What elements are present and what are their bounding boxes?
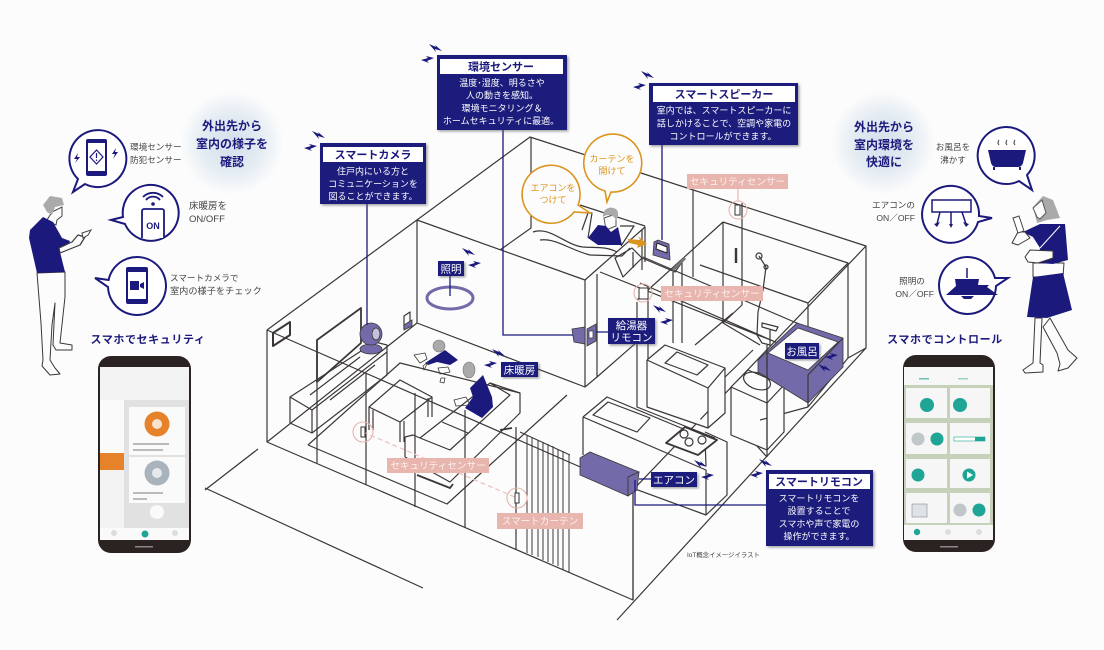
sofa: [405, 383, 520, 482]
callout: smart remote: 設置することで: [788, 506, 850, 516]
callout: environment sensor: 環境モニタリング＆: [461, 102, 543, 114]
callout: smart camera: 住戸内にいる方と: [337, 166, 409, 176]
heading glow right: [831, 91, 935, 195]
security sensor markers: [353, 189, 747, 508]
speech bubbles: voice: エアコンを: [530, 183, 576, 193]
heading: check from outside: 外出先から: [202, 118, 262, 133]
label: AC: エアコンの: [872, 200, 915, 210]
label: bath: 沸かす: [940, 154, 966, 165]
signal bolts: [304, 44, 838, 480]
person: in bed: [588, 208, 622, 245]
heading: check from outside: 確認: [220, 154, 244, 169]
bubble: air conditioner: [922, 186, 992, 243]
frame on wall: [273, 322, 290, 346]
TV: [317, 308, 361, 382]
speech bubbles: voice: カーテンを: [589, 154, 635, 164]
speech bubbles: voice: つけて: [539, 195, 567, 205]
security sensor labels: セキュリティセンサー: [390, 461, 486, 472]
device labels: 給湯器: [616, 319, 648, 332]
callout: environment sensor: 環境センサー: [468, 60, 534, 74]
label: light: 照明の: [899, 276, 925, 286]
label: light: [895, 276, 934, 299]
heading: control comfort: 快適に: [866, 154, 902, 169]
device labels: エアコン: [653, 474, 695, 486]
bubble: sensor phone: [69, 130, 126, 192]
device labels: リモコン: [610, 332, 652, 344]
table: [369, 380, 432, 442]
heading glow left: [180, 91, 284, 195]
bathtub: [758, 323, 843, 403]
bubble: floor heating: ON: [146, 221, 160, 231]
callout: environment sensor: [437, 55, 567, 130]
person: man: [29, 196, 91, 375]
label: sensors: 環境センサー: [130, 141, 182, 152]
label: camera check: スマートカメラで: [170, 273, 238, 283]
callout: environment sensor: 人の動きを感知。: [466, 90, 538, 100]
label: AC: [872, 200, 915, 223]
person: woman: [1012, 196, 1077, 373]
callout: smart remote: 操作ができます。: [783, 530, 855, 542]
blanket: [533, 231, 642, 277]
speech bubbles: voice: 開けて: [598, 166, 626, 176]
device labels: お風呂: [786, 346, 818, 358]
label: bath: お風呂を: [936, 142, 970, 152]
label: AC: ON／OFF: [876, 213, 915, 223]
leader lines: [367, 130, 766, 505]
callout: smart camera: スマートカメラ: [335, 148, 411, 162]
note: IoT概念イメージイラスト: [687, 550, 760, 559]
pillows: [582, 213, 634, 246]
callout: smart camera: コミュニケーションを: [328, 179, 418, 189]
orange arrow: [628, 236, 647, 248]
front wall right part: [633, 350, 767, 600]
heading: control comfort: 外出先から: [854, 119, 914, 134]
label: floor heating: [189, 200, 227, 225]
heading: check from outside: [196, 118, 268, 169]
device labels: 照明: [440, 264, 462, 276]
bubble: bath: [978, 127, 1035, 190]
washing machine: [731, 369, 784, 450]
heading: control comfort: [854, 119, 914, 169]
heading: check from outside: 室内の様子を: [196, 136, 268, 151]
callout: smart speaker: コントロールができます。: [669, 130, 777, 142]
smart speaker: [653, 240, 670, 260]
phone: control app: [903, 355, 995, 552]
bubble: pendant light: [939, 257, 1008, 314]
wall switch: [404, 312, 412, 330]
person: child: [414, 340, 458, 383]
callout: smart remote: スマホや声で家電の: [779, 518, 859, 529]
callout: smart remote: [766, 470, 873, 546]
speech bubbles: voice: [522, 134, 642, 223]
rug and floor: [308, 363, 567, 504]
heading: control: スマホでコントロール: [887, 333, 1003, 346]
callout: smart speaker: スマートスピーカー: [675, 88, 773, 101]
callout: smart camera: 図ることができます。: [328, 190, 418, 202]
lighting ring: [427, 287, 473, 309]
person: mother: [454, 362, 493, 418]
security sensor labels: セキュリティセンサー: [690, 177, 785, 188]
bedside table: [633, 230, 685, 272]
kitchen counter: [583, 397, 727, 515]
label: bath: [936, 142, 970, 165]
gas remote plates: [572, 324, 596, 346]
bubble: camera phone: [95, 257, 166, 315]
callout: smart speaker: 話しかけることで、空調や家電の: [657, 118, 791, 128]
front wall columns: [317, 340, 516, 550]
air conditioner: [580, 452, 639, 496]
TV stand: [290, 342, 387, 433]
label: camera check: 室内の様子をチェック: [170, 285, 262, 296]
camera: [360, 323, 382, 354]
label: light: ON／OFF: [895, 289, 934, 299]
phone: security app: [98, 356, 191, 553]
heading: control comfort: 室内環境を: [854, 137, 914, 152]
device labels: 床暖房: [504, 364, 535, 376]
security sensor labels: セキュリティセンサー: [664, 289, 760, 300]
label: floor heating: ON/OFF: [189, 214, 225, 225]
label: sensors: 防犯センサー: [130, 154, 182, 165]
heading: security: スマホでセキュリティ: [90, 333, 206, 346]
callout: environment sensor: ホームセキュリティに最適。: [443, 115, 559, 126]
callout: smart camera: [320, 143, 426, 204]
label: floor heating: 床暖房を: [189, 200, 227, 212]
panel: isometric apartment illustration: [205, 137, 866, 620]
bubble: floor heating: [111, 185, 179, 241]
device labels: [438, 261, 819, 487]
callout: smart speaker: [649, 83, 798, 145]
security sensor labels: [387, 174, 788, 529]
label: camera check: [170, 273, 262, 296]
curtain: [520, 432, 570, 573]
wash basin unit: [647, 345, 725, 428]
bed: [533, 213, 685, 277]
callout: smart speaker: 室内では、スマートスピーカーに: [657, 104, 791, 116]
walls and floor lines: [205, 137, 866, 620]
leader: light: [449, 276, 451, 296]
shower: [736, 248, 778, 345]
callout: smart remote: スマートリモコンを: [779, 494, 859, 504]
sofa base: [417, 428, 512, 488]
callout: environment sensor: 温度･湿度、明るさや: [459, 77, 545, 88]
callout: smart remote: スマートリモコン: [775, 476, 863, 488]
security sensor labels: スマートカーテン: [502, 516, 578, 528]
label: sensors: [130, 141, 182, 165]
cooktop: [666, 427, 717, 455]
